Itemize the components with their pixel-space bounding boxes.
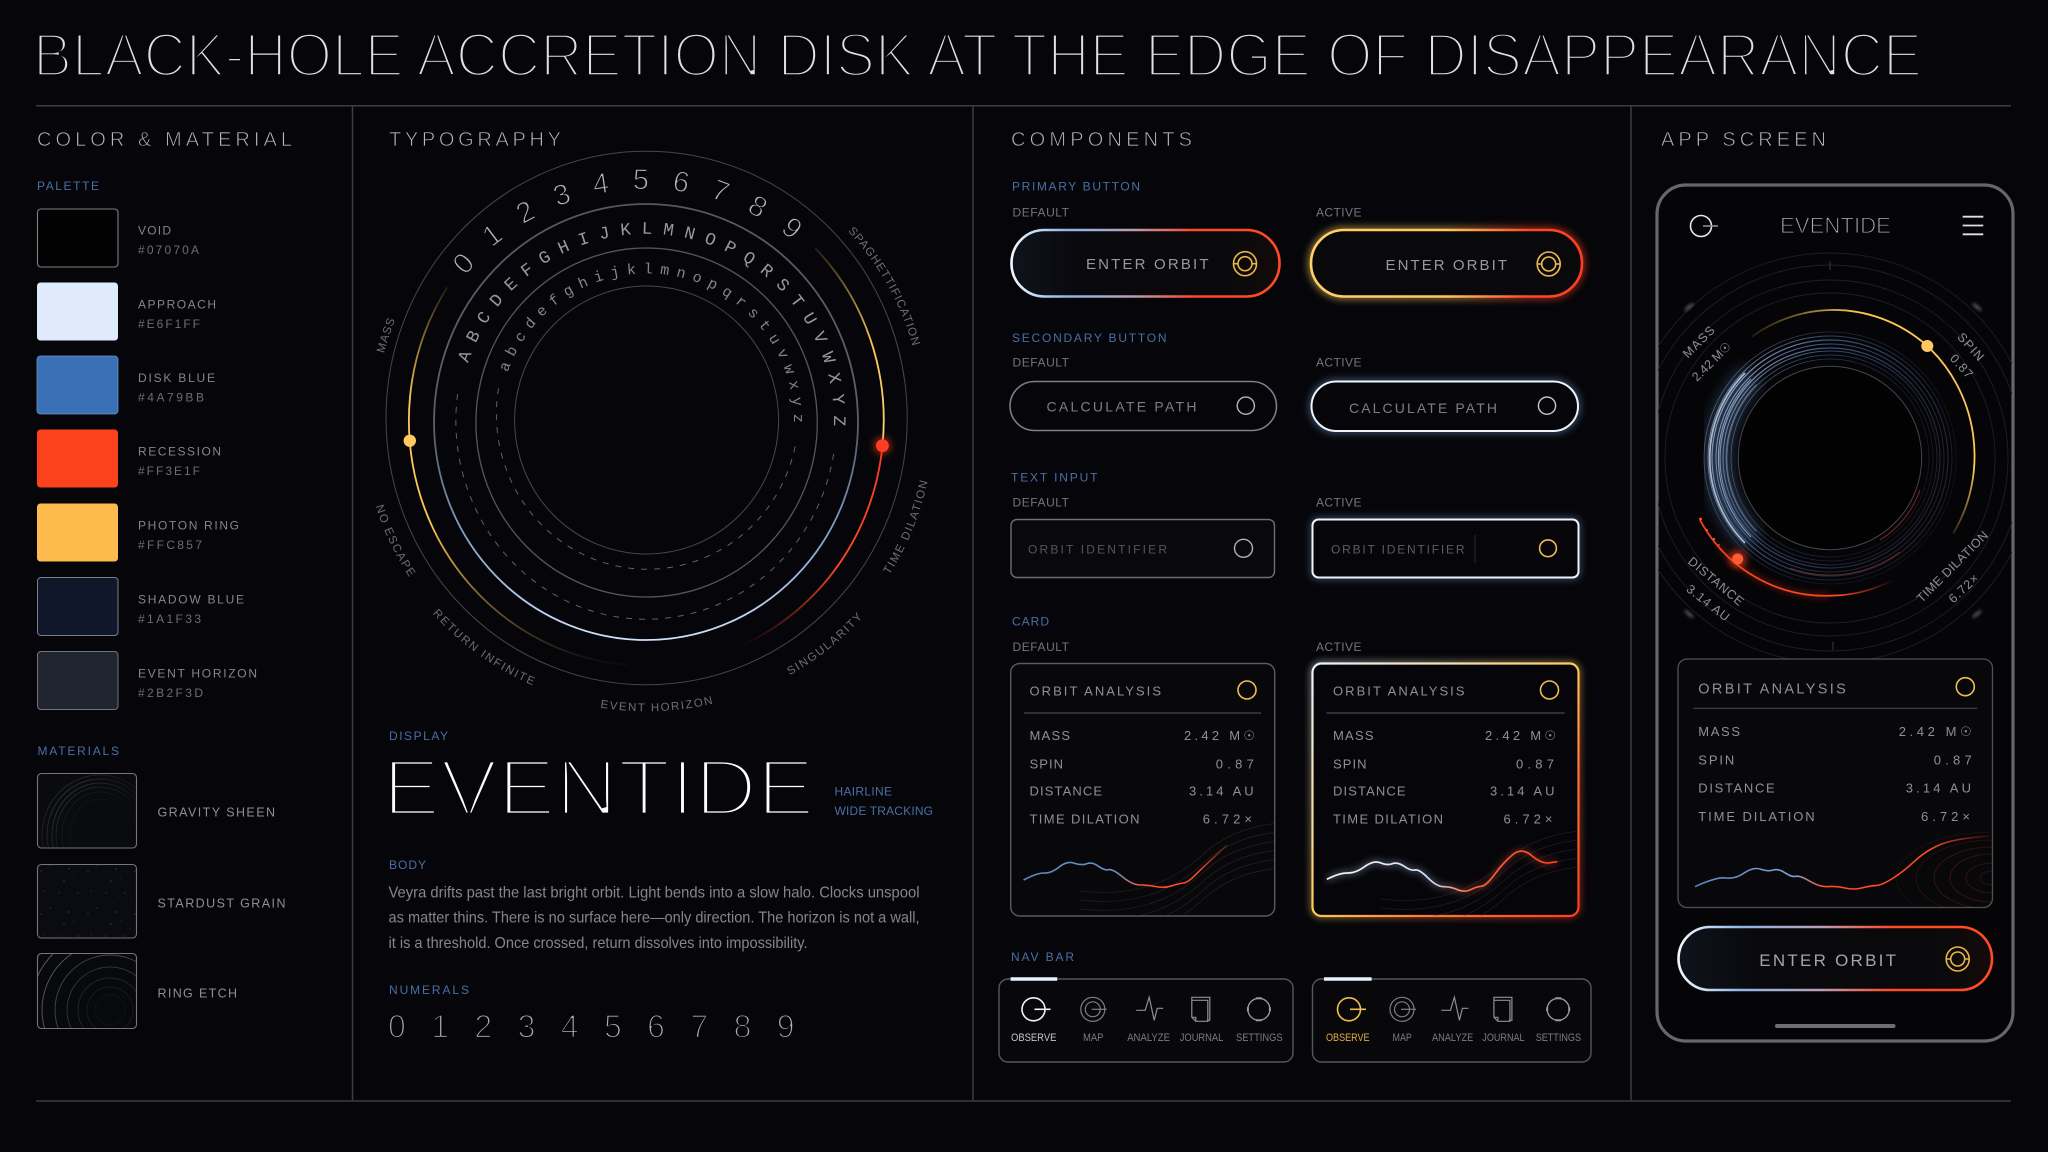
- card: active: MASS: [1333, 728, 1374, 743]
- secondary button: active: CALCULATE PATH: [1349, 400, 1497, 416]
- text input group: ACTIVE: [1316, 496, 1362, 510]
- heading: app screen: APP SCREEN: [1661, 129, 1826, 151]
- phone orbit labels: [1680, 323, 1991, 625]
- phone card: [1677, 658, 1994, 908]
- material: ring etch: [36, 953, 236, 1029]
- phone card: ORBIT ANALYSIS: [1698, 682, 1846, 698]
- nav bar: default: [999, 979, 1293, 1062]
- body specimen: as matter thins. There is no surface here—only direction. The horizon is not a wall,: [388, 910, 920, 926]
- phone header: EVENTIDE: [1780, 213, 1891, 238]
- text input: active: ORBIT IDENTIFIER: [1331, 542, 1465, 556]
- swatch: approach: #E6F1FF: [138, 317, 200, 331]
- primary button: default: [1012, 230, 1280, 296]
- phone card: 3.14 AU: [1906, 781, 1971, 796]
- primary button group: DEFAULT: [1012, 206, 1070, 220]
- card: active: DISTANCE: [1333, 784, 1406, 799]
- nav bar: default: OBSERVE: [1011, 1032, 1056, 1044]
- heading: color and material: COLOR & MATERIAL: [37, 129, 292, 151]
- numerals specimen: 0123456789: [388, 1008, 820, 1044]
- card: default: 6.72×: [1203, 811, 1252, 826]
- card group: DEFAULT: [1012, 640, 1070, 654]
- secondary button group: SECONDARY BUTTON: [1012, 331, 1166, 345]
- phone primary button: ENTER ORBIT: [1759, 951, 1896, 970]
- card: default: 0.87: [1216, 756, 1254, 771]
- phone orbit labels: 6.72×: [1946, 571, 1982, 606]
- material: ring etch: RING ETCH: [158, 986, 237, 1000]
- phone orbit labels: 2.42 M☉: [1689, 339, 1734, 384]
- phone orbit labels: TIME DILATION: [1914, 528, 1991, 605]
- orbit marker: red: [873, 437, 891, 455]
- card: active: TIME DILATION: [1333, 811, 1443, 826]
- display specimen: WIDE TRACKING: [834, 804, 933, 818]
- phone orbit labels: SPIN: [1954, 330, 1988, 365]
- body specimen: it is a threshold. Once crossed, return dissolves into impossibility.: [388, 935, 808, 952]
- panel: color and material: [30, 129, 292, 1090]
- phone orbit labels: 0.87: [1947, 351, 1976, 382]
- card: default: MASS: [1030, 728, 1070, 743]
- text input group: DEFAULT: [1012, 496, 1070, 510]
- orbit marker: phone gold: [1921, 340, 1933, 352]
- swatch: recession: RECESSION: [138, 444, 221, 458]
- phone orbit labels: MASS: [1680, 323, 1718, 361]
- nav bar: default: MAP: [1083, 1032, 1104, 1044]
- nav bar: active: OBSERVE: [1326, 1032, 1370, 1044]
- secondary button group: ACTIVE: [1316, 356, 1362, 370]
- swatch: photon ring: [37, 504, 239, 562]
- swatch: disk blue: #4A79BB: [138, 390, 204, 404]
- swatch: void: [38, 209, 199, 267]
- accretion disk visual: [1625, 253, 2035, 663]
- ring labels: TIME DILATION: [882, 480, 928, 572]
- phone primary button: [1678, 927, 1992, 990]
- nav bar: default: ANALYZE: [1127, 1032, 1170, 1044]
- swatch: recession: #FF3E1F: [138, 464, 200, 478]
- secondary button: default: CALCULATE PATH: [1046, 398, 1196, 414]
- swatch: shadow blue: [38, 578, 244, 636]
- primary button: active: [1311, 230, 1582, 296]
- nav bar: default: JOURNAL: [1180, 1032, 1223, 1044]
- secondary button: default: [1010, 382, 1276, 430]
- panel: typography: [376, 129, 933, 1044]
- heading: typography: TYPOGRAPHY: [389, 129, 561, 151]
- heading: components: COMPONENTS: [1011, 129, 1192, 151]
- secondary button: active: [1312, 382, 1578, 431]
- lowercase letters on arc: abcdefghijklmnopqrstuvwxyz: [501, 262, 802, 422]
- panel: components: [999, 129, 1591, 1062]
- swatch: void: #07070A: [138, 243, 199, 257]
- ring labels: [376, 227, 928, 712]
- orbit marker: gold: [404, 435, 416, 447]
- material: gravity sheen: GRAVITY SHEEN: [158, 806, 275, 820]
- secondary button group: [1010, 331, 1578, 431]
- card: active: [1312, 664, 1581, 936]
- phone card: 0.87: [1934, 752, 1972, 767]
- sparkline: default: [1024, 845, 1227, 887]
- swatch: approach: [37, 282, 216, 340]
- card: default: TIME DILATION: [1030, 811, 1140, 826]
- material: stardust grain: STARDUST GRAIN: [158, 896, 286, 910]
- numerals specimen: NUMERALS: [389, 983, 469, 997]
- nav bar: active: ANALYZE: [1432, 1032, 1473, 1044]
- display specimen: HAIRLINE: [834, 784, 892, 798]
- swatch: event horizon: #2B2F3D: [138, 686, 203, 700]
- primary button group: ACTIVE: [1316, 206, 1362, 220]
- card: default: 2.42 M☉: [1184, 728, 1255, 743]
- swatch: disk blue: [37, 356, 215, 414]
- material: gravity sheen: [36, 773, 274, 848]
- nav bar group: NAV BAR: [1011, 950, 1074, 964]
- display specimen: DISPLAY: [389, 729, 448, 743]
- radial type specimen: [376, 150, 928, 712]
- uppercase letters on arc: ABCDEFGHIJKLMNOPQRSTUVWXYZ: [458, 222, 846, 426]
- text input: default: [1011, 520, 1274, 578]
- swatch: shadow blue: #1A1F33: [138, 612, 201, 626]
- swatch: photon ring: #FFC857: [138, 538, 202, 552]
- orbit marker: phone red: [1729, 550, 1747, 568]
- ring labels: EVENT HORIZON: [601, 696, 712, 712]
- palette label: PALETTE: [37, 179, 99, 193]
- numerals on arc: 0123456789: [454, 170, 800, 272]
- primary button group: [1012, 180, 1582, 296]
- phone orbit labels: 3.14 AU: [1684, 582, 1733, 625]
- card group: ACTIVE: [1316, 640, 1362, 654]
- secondary button group: DEFAULT: [1012, 356, 1070, 370]
- phone card: DISTANCE: [1698, 781, 1775, 796]
- nav bar: active: [1312, 979, 1591, 1062]
- swatch: recession: [37, 430, 221, 488]
- material: stardust grain: [38, 864, 286, 938]
- primary button: default: ENTER ORBIT: [1086, 256, 1208, 273]
- sparkline: phone: [1695, 836, 1990, 889]
- swatch: shadow blue: SHADOW BLUE: [138, 592, 244, 606]
- title: BLACK-HOLE ACCRETION DISK AT THE EDGE OF DISAPPEARANCE: [33, 21, 1922, 89]
- card group: CARD: [1012, 614, 1049, 628]
- card: default: 3.14 AU: [1189, 784, 1254, 799]
- nav bar: active: JOURNAL: [1482, 1032, 1525, 1044]
- phone header: [1690, 213, 1983, 238]
- materials label: MATERIALS: [38, 744, 119, 758]
- body specimen: BODY: [389, 858, 426, 872]
- phone card: MASS: [1698, 724, 1740, 739]
- numerals specimen: [388, 983, 820, 1044]
- card: default: DISTANCE: [1030, 784, 1102, 799]
- sparkline: active: [1327, 851, 1557, 891]
- text input: active: [1312, 520, 1578, 578]
- card: default: ORBIT ANALYSIS: [1030, 684, 1161, 698]
- text input: default: ORBIT IDENTIFIER: [1028, 542, 1167, 556]
- ring labels: MASS: [376, 318, 394, 352]
- ring labels: SPAGHETTIFICATION: [849, 227, 920, 346]
- body specimen: [388, 858, 920, 952]
- card group: [1011, 614, 1581, 937]
- swatch: event horizon: EVENT HORIZON: [138, 666, 257, 680]
- phone card: SPIN: [1698, 752, 1734, 767]
- swatch: approach: APPROACH: [138, 298, 216, 312]
- primary button group: PRIMARY BUTTON: [1012, 180, 1140, 194]
- swatch: void: VOID: [138, 224, 171, 238]
- phone orbit labels: DISTANCE: [1685, 554, 1747, 609]
- card: active: 3.14 AU: [1490, 784, 1554, 799]
- nav bar: active: SETTINGS: [1536, 1032, 1581, 1044]
- panel: app screen: [1655, 132, 2015, 1043]
- swatch: disk blue: DISK BLUE: [138, 371, 215, 385]
- card: active: 2.42 M☉: [1485, 728, 1556, 743]
- swatch: photon ring: PHOTON RING: [138, 518, 239, 532]
- ring labels: SINGULARITY: [787, 612, 860, 674]
- nav bar: active: MAP: [1392, 1032, 1412, 1044]
- card: active: 6.72×: [1504, 811, 1552, 826]
- ring labels: NO ESCAPE: [376, 504, 416, 577]
- card: default: SPIN: [1030, 756, 1063, 771]
- nav bar: default: SETTINGS: [1236, 1032, 1283, 1044]
- card: active: SPIN: [1333, 756, 1366, 771]
- card: active: ORBIT ANALYSIS: [1333, 684, 1465, 698]
- phone card: TIME DILATION: [1698, 809, 1815, 824]
- phone card: 2.42 M☉: [1899, 724, 1972, 739]
- phone card: 6.72×: [1921, 809, 1970, 824]
- text input group: TEXT INPUT: [1011, 470, 1098, 484]
- primary button: active: ENTER ORBIT: [1386, 257, 1507, 274]
- ring labels: RETURN INFINITE: [433, 608, 536, 686]
- card: default: [1011, 664, 1280, 937]
- home indicator: [1775, 1024, 1896, 1028]
- nav bar group: [999, 950, 1591, 1062]
- phone frame: [1655, 183, 2015, 1043]
- display specimen: EVENTIDE: [382, 743, 814, 832]
- card: active: 0.87: [1516, 756, 1554, 771]
- text input group: [1011, 470, 1578, 578]
- body specimen: Veyra drifts past the last bright orbit. Light bends into a slow halo. Clocks unspool: [388, 884, 920, 902]
- swatch: event horizon: [38, 652, 257, 710]
- display specimen: [382, 729, 933, 832]
